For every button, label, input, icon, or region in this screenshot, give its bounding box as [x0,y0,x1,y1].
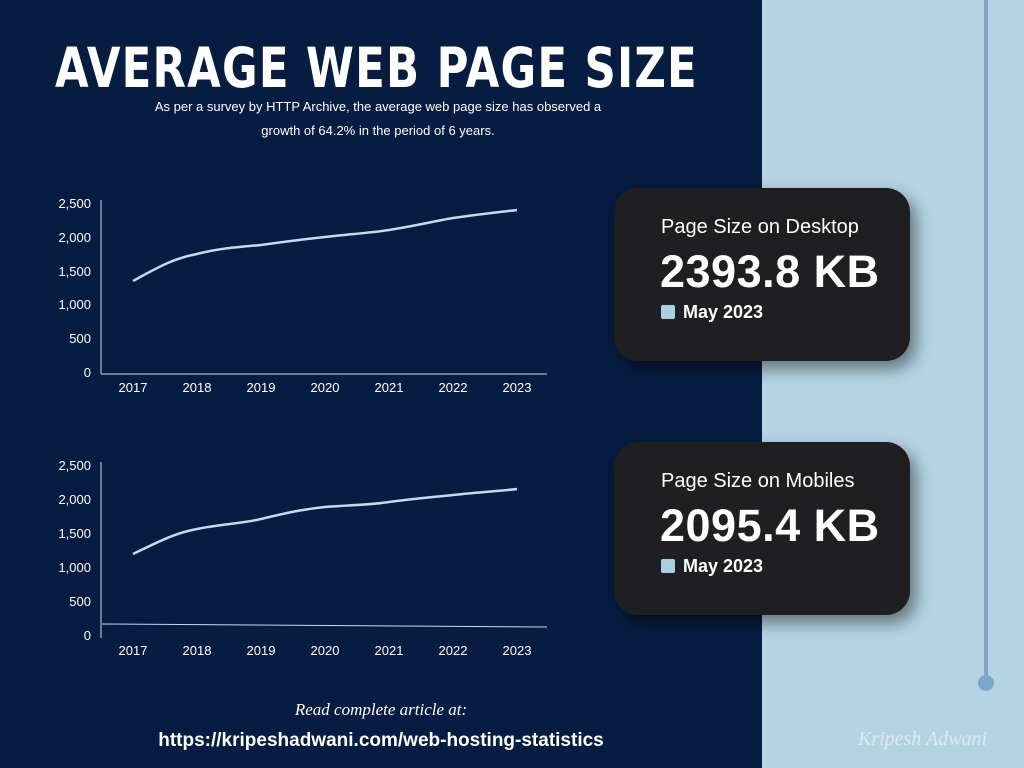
chart: mobile: 1,000 [58,560,91,575]
chart: desktop: 2020 [311,380,339,395]
date: May 2023 [683,302,763,322]
subtitle [154,99,602,138]
value: 2393.8 KB [660,246,880,297]
decorative vertical line with dot [984,0,988,683]
chart: mobile: 2,000 [58,492,91,507]
chart: desktop: 2019 [247,380,275,395]
card: mobile [614,442,910,615]
value: 2095.4 KB [660,500,880,551]
chart: desktop [58,196,547,395]
chart: mobile: 2,500 [58,458,91,473]
subtitle: growth of 64.2% in the period of 6 years. [261,123,495,138]
chart: mobile [58,458,547,658]
chart: mobile: 2022 [439,643,467,658]
chart: mobile: 0 [84,628,91,643]
chart: mobile: 1,500 [58,526,91,541]
chart: desktop: 2021 [375,380,403,395]
dark background panel [0,0,762,768]
chart: mobile: 2023 [503,643,531,658]
chart: mobile: 2018 [183,643,211,658]
card: desktop [614,188,910,361]
chart: mobile: 2017 [119,643,147,658]
chart: mobile: 2019 [247,643,275,658]
title: AVERAGE WEB PAGE SIZE [55,36,698,100]
chart: desktop: 0 [84,365,91,380]
chart: desktop: 500 [69,331,91,346]
chart: mobile: 500 [69,594,91,609]
chart: desktop: 2023 [503,380,531,395]
chart: mobile: 2021 [375,643,403,658]
chart: desktop: 2018 [183,380,211,395]
chart: desktop: 1,000 [58,297,91,312]
subtitle: As per a survey by HTTP Archive, the average web page size has observed a [155,99,601,114]
date: May 2023 [683,556,763,576]
chart: desktop: 2017 [119,380,147,395]
chart: mobile: 2020 [311,643,339,658]
signature: Kripesh Adwani [858,728,987,750]
footer link: https://kripeshadwani.com/web-hosting-statistics [158,730,604,751]
label: Page Size on Mobiles [661,470,854,492]
footer caption: Read complete article at: [295,700,467,719]
label: Page Size on Desktop [661,216,859,238]
chart: desktop: 2,000 [58,230,91,245]
chart: desktop: 2,500 [58,196,91,211]
timeline dot [978,675,994,691]
chart: desktop: 2022 [439,380,467,395]
chart: desktop: 1,500 [58,264,91,279]
